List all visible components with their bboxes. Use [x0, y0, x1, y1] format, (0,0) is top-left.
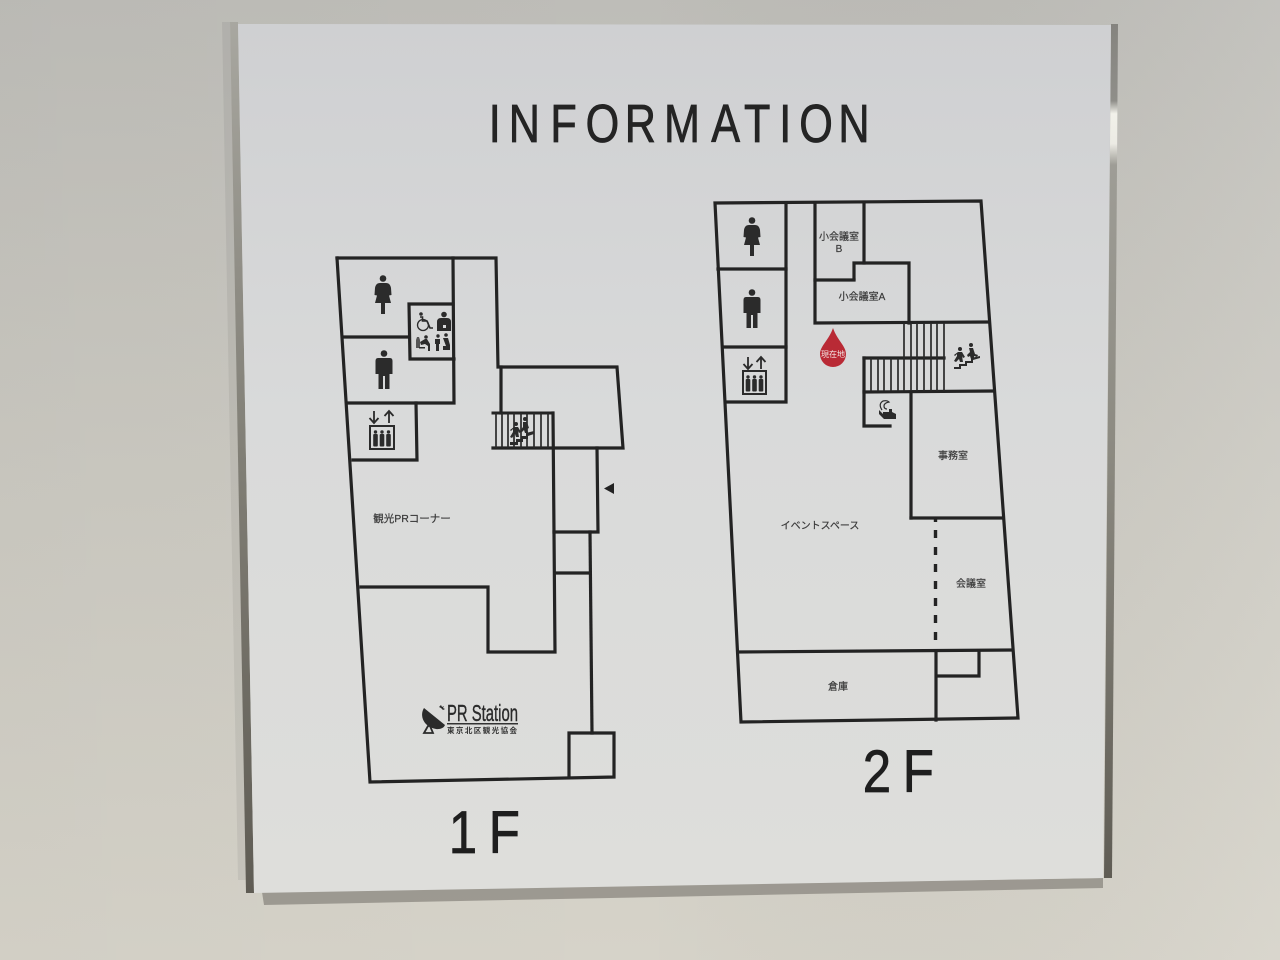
icon: accessible restroom	[416, 312, 451, 351]
label: storage: 倉庫	[828, 680, 848, 693]
icon: elevator 2F	[743, 357, 766, 394]
icon: men's restroom 2F	[744, 289, 760, 328]
label: office: 事務室	[938, 449, 968, 462]
logo: PR Station: PR Station	[447, 700, 518, 726]
title: INFORMATION	[489, 95, 870, 154]
label: B: B	[836, 244, 843, 255]
logo: PR Station: 東京北区観光協会	[447, 725, 518, 735]
label: event space: イベントスペース	[781, 520, 859, 532]
floor label: 1F: 1F	[449, 799, 520, 866]
icon: stairs 2F	[954, 343, 980, 369]
label: tourism PR corner: 観光PRコーナー	[373, 512, 451, 525]
icon: entrance arrow	[604, 483, 614, 494]
marker: current location: 現在地	[821, 349, 845, 359]
marker: current location	[820, 328, 846, 367]
2F stairs	[871, 323, 944, 391]
icon: elevator 1F	[370, 411, 394, 449]
label: small meeting room A: 小会議室A	[839, 290, 886, 303]
floor label: 2F: 2F	[863, 738, 934, 805]
icon: men's restroom 1F	[376, 350, 392, 389]
sign panel	[222, 22, 1118, 905]
label: small meeting room B: 小会議室	[819, 230, 859, 243]
floor plan: 2F	[715, 201, 1018, 722]
2F walls	[715, 201, 1018, 722]
1F stairs	[493, 413, 553, 448]
1F walls	[337, 258, 623, 782]
logo: PR Station	[422, 700, 518, 735]
icon: women's restroom 2F	[744, 217, 760, 256]
2F dashed partition	[934, 519, 937, 640]
label: meeting room: 会議室	[956, 577, 986, 590]
icon: copier / kitchenette	[879, 401, 896, 419]
icon: women's restroom 1F	[374, 275, 392, 314]
floor plan: 1F	[337, 258, 623, 782]
